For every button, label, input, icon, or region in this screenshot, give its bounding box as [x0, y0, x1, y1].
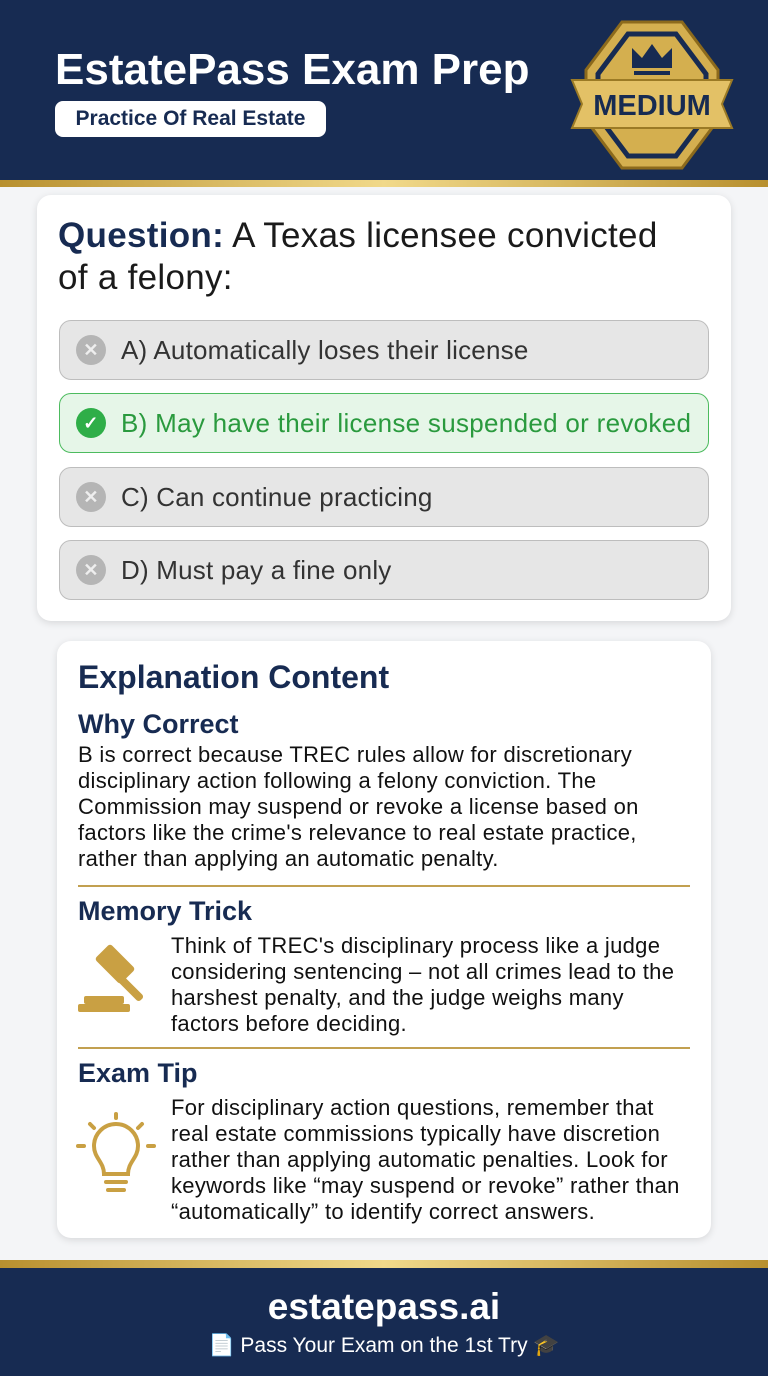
exam tip heading: Exam Tip — [78, 1058, 198, 1088]
option C: ✕ — [83, 486, 99, 506]
panel: explanation — [57, 641, 711, 1238]
explanation heading: Explanation Content — [78, 659, 389, 695]
option A: A) Automatically loses their license — [121, 334, 528, 364]
subtitle pill: Practice Of Real Estate — [76, 107, 305, 130]
footer — [0, 1268, 768, 1376]
exam tip text: For disciplinary action questions, remember that real estate commissions typically have discretion rather than applying automatic penalties. Look for keywords like “may suspend or revoke” rather than “automatically” to identify correct answers. — [171, 1095, 680, 1224]
icon: lightbulb — [76, 1112, 156, 1192]
option D: ✕ — [83, 560, 99, 580]
option C — [59, 467, 709, 527]
option B correct: ✓ — [83, 412, 99, 432]
option B correct: B) May have their license suspended or revoked — [121, 408, 691, 438]
footer brand: estatepass.ai — [268, 1286, 500, 1327]
memory trick heading: Memory Trick — [78, 896, 252, 926]
badge: medium — [570, 20, 734, 170]
option C: C) Can continue practicing — [121, 482, 433, 512]
tagline: 📄 Pass Your Exam on the 1st Try 🎓 — [208, 1334, 560, 1357]
option D: D) Must pay a fine only — [121, 554, 392, 584]
badge: medium: MEDIUM — [593, 90, 711, 122]
panel: question — [37, 195, 731, 621]
option D — [59, 540, 709, 600]
memory trick text: Think of TREC's disciplinary process like a judge considering sentencing – not all crimes lead to the harshest penalty, and the judge weighs many factors before deciding. — [171, 933, 674, 1036]
why correct: Why Correct — [78, 709, 239, 739]
subtitle pill — [55, 101, 326, 137]
icon: gavel — [78, 944, 143, 1012]
option B correct — [59, 393, 709, 453]
title: EstatePass Exam Prep — [55, 45, 530, 94]
question text: Question: A Texas licensee convicted of a felony: — [58, 216, 658, 297]
header — [0, 0, 768, 180]
option A — [59, 320, 709, 380]
option A: ✕ — [83, 340, 99, 360]
why correct: B is correct because TREC rules allow for discretionary disciplinary action following a felony conviction. The Commission may suspend or revoke a license based on factors like the crime's relevance to real estate practice, rather than applying an automatic penalty. — [78, 742, 639, 871]
